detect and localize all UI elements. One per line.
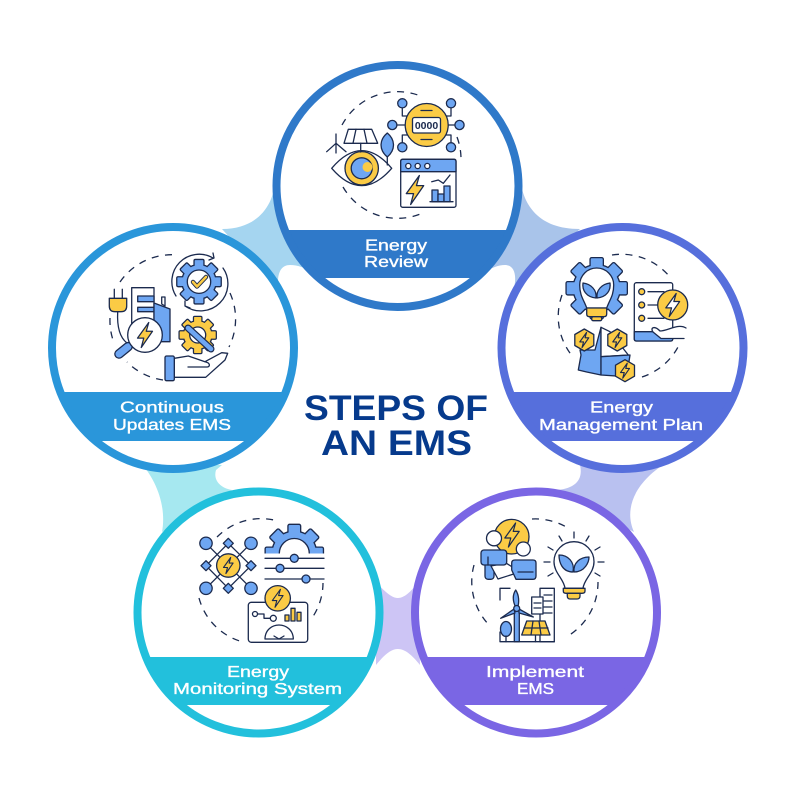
icon: city with turbine and solar: [500, 588, 554, 642]
ring: [276, 65, 518, 307]
label text: Updates EMS: [113, 417, 231, 434]
label text: [539, 400, 703, 434]
icon: eye with solar panel, turbine and leaf: [327, 129, 393, 186]
label band: [428, 657, 644, 705]
label text: Management Plan: [539, 417, 703, 434]
label band: [64, 392, 282, 441]
label band: [289, 230, 506, 278]
label text: [486, 664, 585, 698]
panel: energy review: [270, 65, 530, 307]
label text: [173, 664, 342, 698]
label text: EMS: [517, 681, 554, 698]
icon: plug, building and magnifier: [109, 288, 170, 354]
ring: [138, 492, 380, 734]
label text: Implement: [486, 664, 585, 681]
title: [304, 389, 488, 463]
panel: implement EMS: [410, 492, 670, 734]
icon: eco light bulb: [544, 532, 604, 599]
label band: [514, 392, 731, 441]
icon: people with energy: [481, 519, 536, 579]
panel: energy monitoring system: [130, 492, 390, 734]
ring: [502, 227, 744, 469]
icon: map with energy hexagons: [575, 327, 634, 382]
label text: [113, 400, 231, 434]
title: STEPS OF: [304, 389, 488, 428]
label text: Energy: [365, 238, 427, 255]
icon: gear with eco bulb: [567, 258, 627, 321]
label text: [364, 238, 429, 271]
connector: management plan to implement: [556, 462, 668, 532]
icon: monitoring device: [248, 586, 308, 642]
ring: [415, 492, 657, 734]
label text: Energy: [590, 400, 653, 417]
label text: Energy: [227, 664, 289, 681]
icon: smart meter with nodes: 0000: [415, 120, 438, 132]
label band: [150, 657, 367, 705]
title: AN EMS: [321, 424, 472, 463]
icon: checklist with hand: [634, 283, 688, 341]
connector: energy review to management plan: [484, 180, 580, 292]
label text: Continuous: [120, 400, 224, 417]
icon: energy network: [200, 537, 257, 594]
icon: half gear with sliders: [265, 525, 324, 583]
connector: monitoring system to implement: [376, 582, 420, 665]
label text: Monitoring System: [173, 681, 342, 698]
connector: continuous updates to monitoring system: [140, 462, 232, 532]
connector: energy review to continuous updates: [222, 180, 312, 292]
icon: hand: [165, 353, 228, 381]
label text: Review: [364, 254, 429, 271]
icon: yellow gear with wrench: [180, 317, 216, 353]
icon: gear with check and cycle arrows: [172, 253, 228, 311]
panel: continuous updates EMS: [45, 227, 305, 469]
ring: [52, 227, 294, 469]
panel: energy management plan: [495, 227, 755, 469]
icon: smart meter with nodes: [388, 99, 464, 152]
icon: dashboard window: [401, 159, 456, 207]
